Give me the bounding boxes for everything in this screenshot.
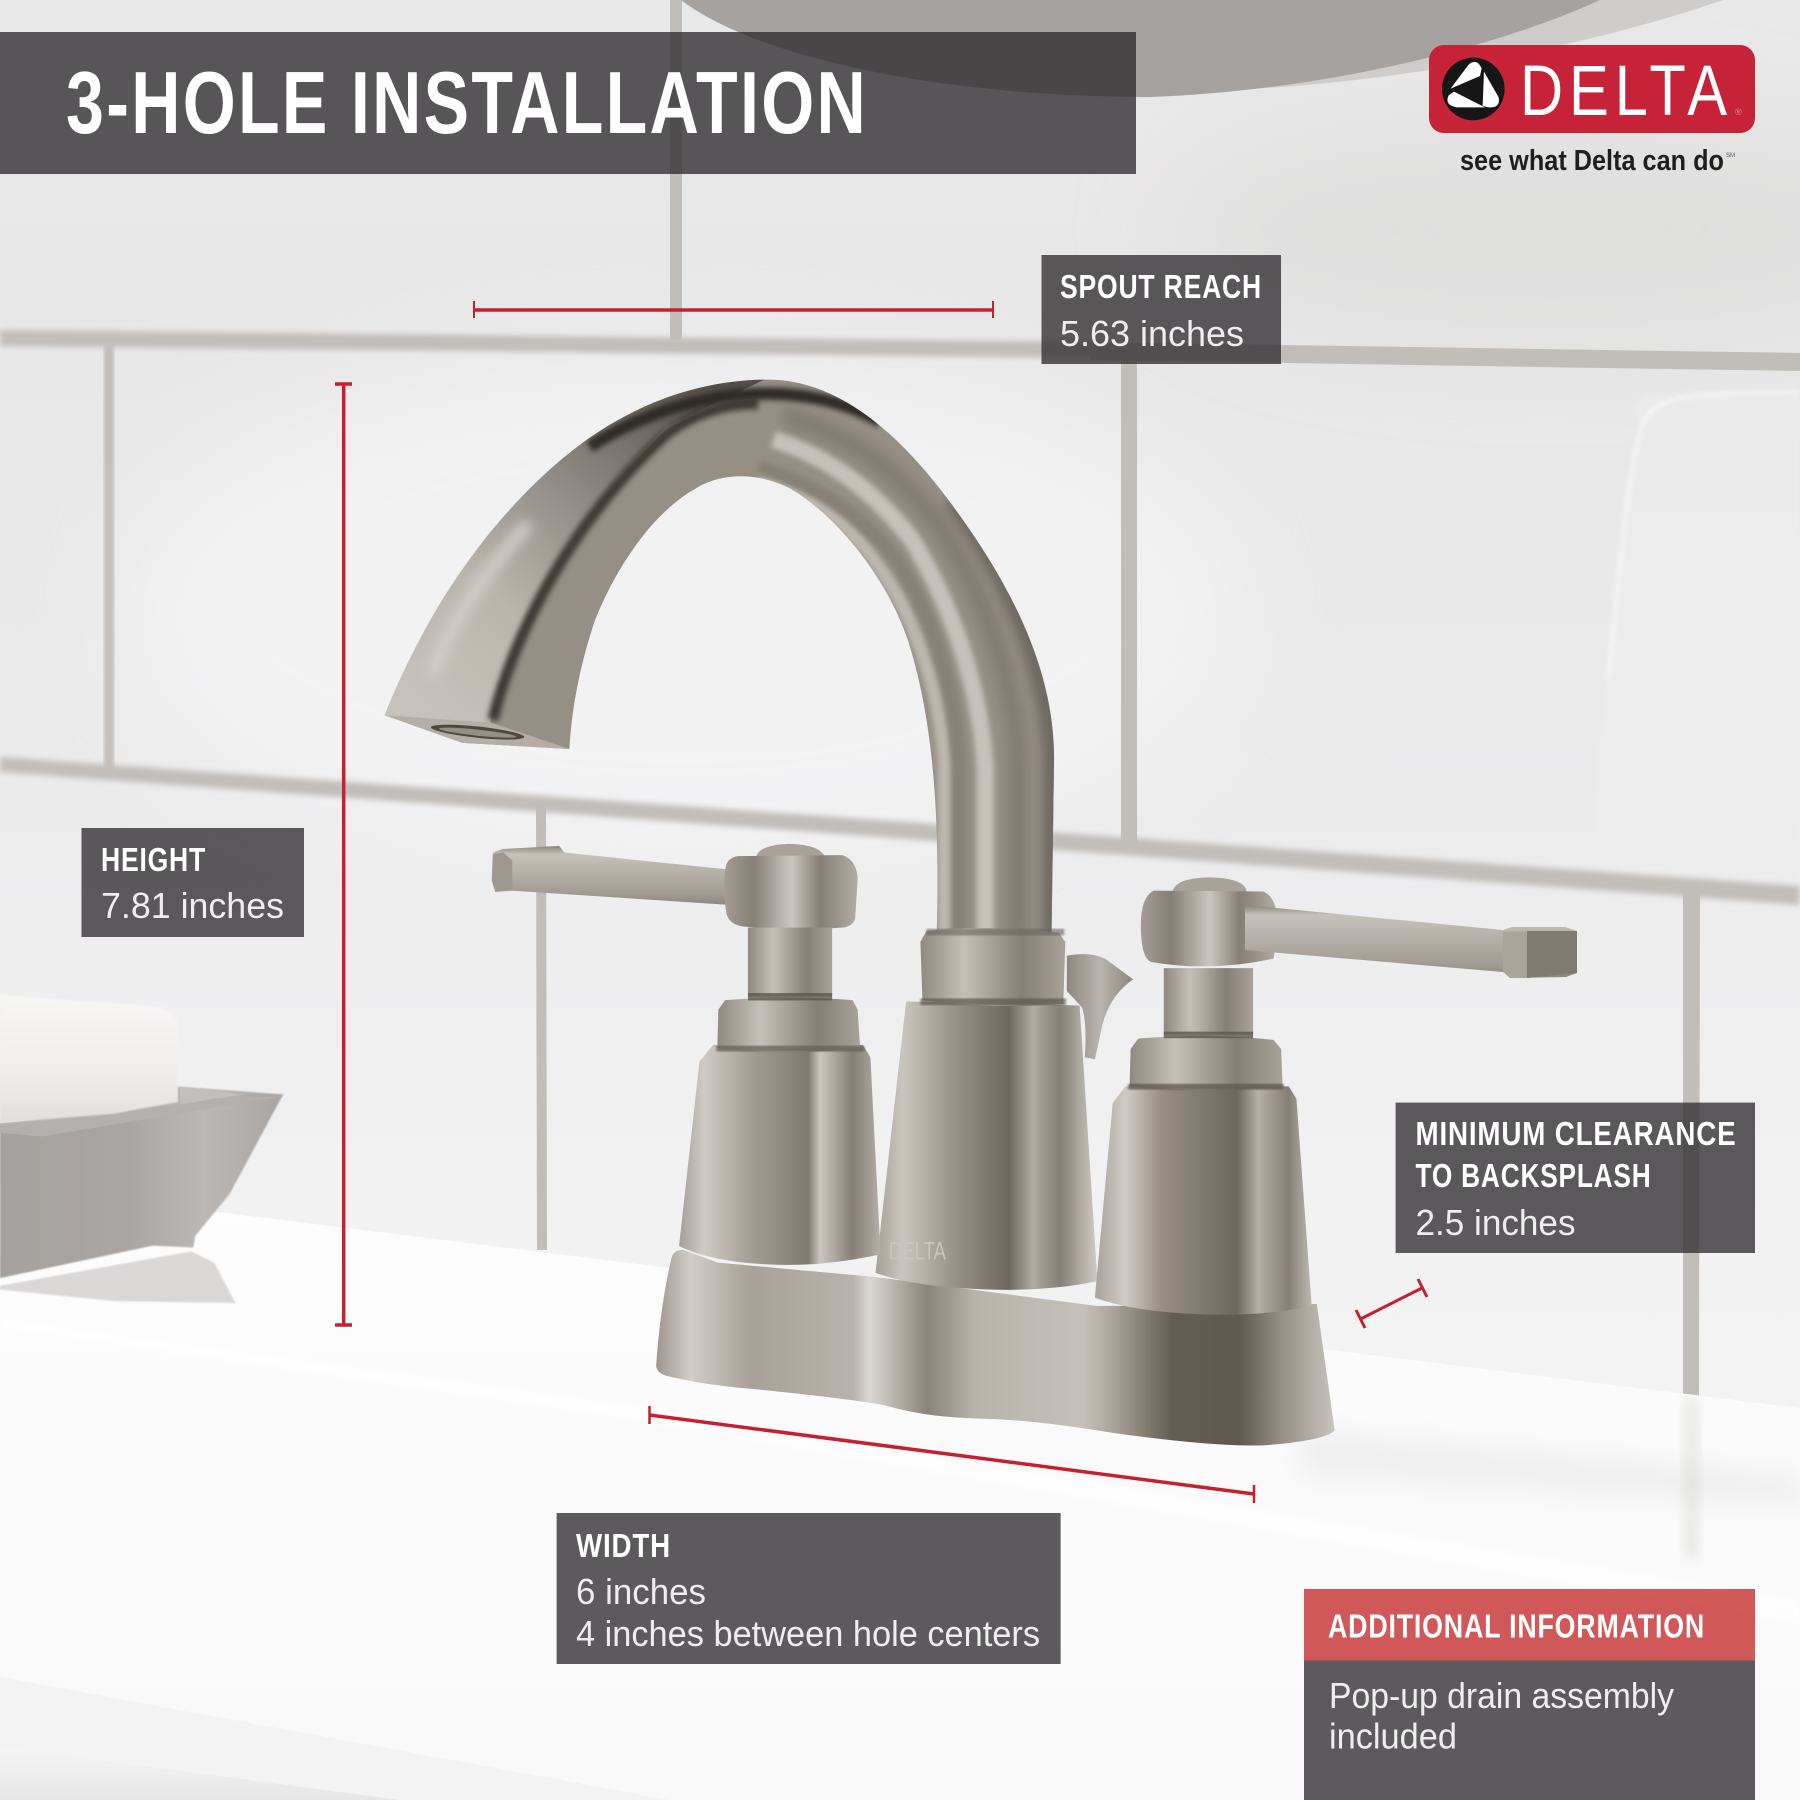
panel body: included [1329,1716,1457,1757]
Delta logo: ® [1735,107,1742,117]
callout: minimum clearance to backsplash: 2.5 inches [1416,1202,1576,1243]
icon: delta triangle mark [1442,58,1505,120]
center body [876,928,1097,1290]
right handle [1095,877,1312,1315]
panel heading [1304,1589,1755,1660]
callout: spout reach: 5.63 inches [1060,313,1244,354]
right lever [1245,905,1577,978]
panel body [1304,1660,1755,1800]
spout [381,370,1054,942]
soap dish with soap [0,995,283,1303]
callout: width: WIDTH [576,1527,671,1564]
faucet [381,370,1577,1446]
callout: height [82,828,304,937]
callout: spout reach: SPOUT REACH [1060,268,1262,305]
callout: width: 4 inches between hole centers [576,1613,1040,1654]
dimension line: minimum clearance [1356,1279,1427,1328]
dimension line: spout reach [474,301,993,318]
engraved brand mark: DELTA [889,1238,946,1266]
panel: additional information [1304,1589,1755,1800]
callout: minimum clearance to backsplash [1396,1103,1755,1253]
faucet base [656,1250,1335,1446]
tagline: SM [1726,153,1735,159]
callout: width [557,1513,1061,1664]
callout: width: 6 inches [576,1571,706,1612]
left handle top and lever [492,844,858,996]
left handle body [679,993,881,1265]
logo wordmark: DELTA [1520,52,1733,131]
callout: minimum clearance to backsplash: TO BACKSPLASH [1416,1157,1652,1194]
panel body: Pop-up drain assembly [1329,1675,1674,1716]
countertop [0,1185,1800,1800]
panel heading: ADDITIONAL INFORMATION [1328,1608,1705,1645]
callout: height: HEIGHT [101,841,206,878]
Delta logo [1429,45,1755,177]
callout: minimum clearance to backsplash: MINIMUM CLEARANCE [1416,1115,1736,1152]
title bar [0,32,1136,174]
callout: spout reach [1042,255,1281,364]
dimension line: height [335,384,352,1325]
dimension line: width [650,1406,1254,1503]
title: 3-HOLE INSTALLATION [66,53,868,152]
callout: height: 7.81 inches [101,885,284,926]
overhead basin shape [681,0,1723,97]
tagline: see what Delta can do [1460,145,1724,177]
pop-up lever [1067,954,1133,1059]
